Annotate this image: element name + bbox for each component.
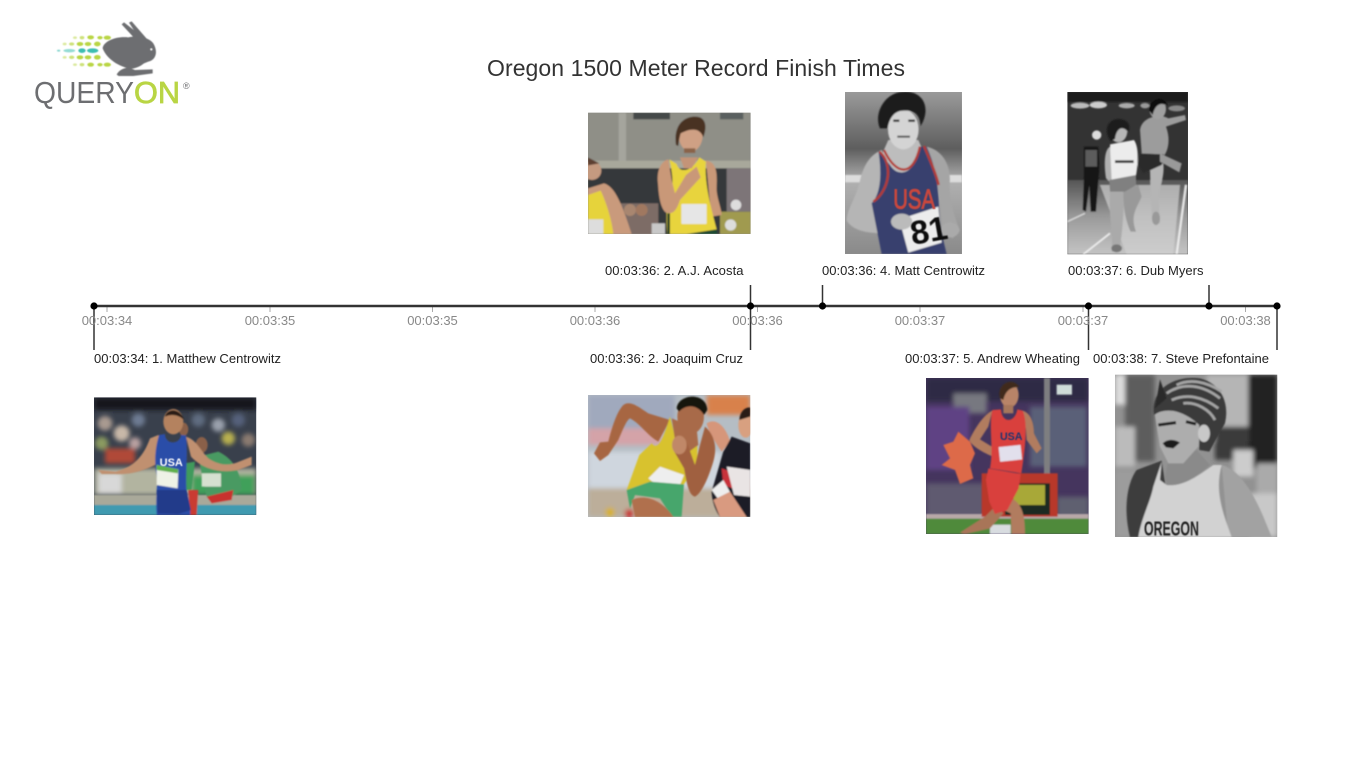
- axis tick labels: 00:03:37: [1058, 313, 1108, 328]
- torso: [666, 157, 717, 234]
- vest: [872, 147, 947, 254]
- photo: Andrew Wheating: USA: [1000, 431, 1023, 443]
- arms: [846, 150, 884, 234]
- background figure: [1083, 147, 1099, 212]
- axis tick labels: 00:03:37: [895, 313, 945, 328]
- axis tick labels: 00:03:36: [570, 313, 620, 328]
- photo: Dub Myers: [1067, 92, 1188, 254]
- logo wordmark: QUERY: [34, 75, 134, 110]
- logo wordmark: ON: [134, 75, 180, 110]
- axis tick labels: [82, 313, 1271, 328]
- singlet: [990, 409, 1026, 473]
- photo: Matthew Centrowitz: USA: [160, 457, 183, 469]
- photo: Matt Centrowitz: 81: [907, 210, 950, 253]
- axis tick labels: 00:03:34: [82, 313, 132, 328]
- label: Matt Centrowitz: 00:03:36: 4. Matt Centrowitz: [822, 263, 985, 278]
- front runner: [1104, 146, 1112, 182]
- photo: Matt Centrowitz: [845, 92, 962, 254]
- far arm and shoulder: [706, 161, 722, 217]
- event markers: [90, 302, 1281, 310]
- label: Matthew Centrowitz: 00:03:34: 1. Matthew Centrowitz: [94, 351, 281, 366]
- photo: Joaquim Cruz: [588, 395, 753, 518]
- axis ticks: [107, 306, 1246, 312]
- label: Andrew Wheating: 00:03:37: 5. Andrew Wheating: [905, 351, 1080, 366]
- far runner: [707, 421, 730, 452]
- far arm: [673, 427, 715, 497]
- axis tick labels: 00:03:35: [245, 313, 295, 328]
- axis line: [94, 305, 1277, 307]
- rear runner: [1148, 162, 1164, 186]
- axis tick labels: 00:03:35: [407, 313, 458, 328]
- photo: Steve Prefontaine: OREGON: [1144, 518, 1199, 541]
- torso: [627, 417, 697, 490]
- timeline axis: [90, 285, 1281, 350]
- near arm raised: [594, 403, 670, 461]
- photo: Steve Prefontaine: [1115, 375, 1277, 541]
- event stems: [94, 285, 1277, 350]
- hair: [1154, 378, 1226, 452]
- photo: Matthew Centrowitz: [94, 397, 256, 515]
- icon: rabbit with motion dots: [57, 21, 156, 76]
- legs: [960, 505, 1003, 534]
- registered mark: ®: [183, 81, 190, 91]
- axis tick labels: 00:03:38: [1220, 313, 1271, 328]
- photo: Andrew Wheating: [926, 378, 1089, 534]
- photo: Matt Centrowitz: USA: [893, 183, 935, 214]
- label: A.J. Acosta: 00:03:36: 2. A.J. Acosta: [605, 263, 744, 278]
- photo: A.J. Acosta: [583, 113, 751, 234]
- label: Steve Prefontaine: 00:03:38: 7. Steve Prefontaine: [1093, 351, 1269, 366]
- arms: [968, 410, 993, 456]
- title: Oregon 1500 Meter Record Finish Times: [487, 55, 905, 81]
- face: [1155, 411, 1201, 463]
- near arm: [658, 159, 701, 213]
- face: [888, 109, 919, 149]
- label: Joaquim Cruz: 00:03:36: 2. Joaquim Cruz: [590, 351, 743, 366]
- axis tick labels: 00:03:36: [732, 313, 783, 328]
- logo: QueryOn: [34, 21, 190, 110]
- label: Dub Myers: 00:03:37: 6. Dub Myers: [1068, 263, 1204, 278]
